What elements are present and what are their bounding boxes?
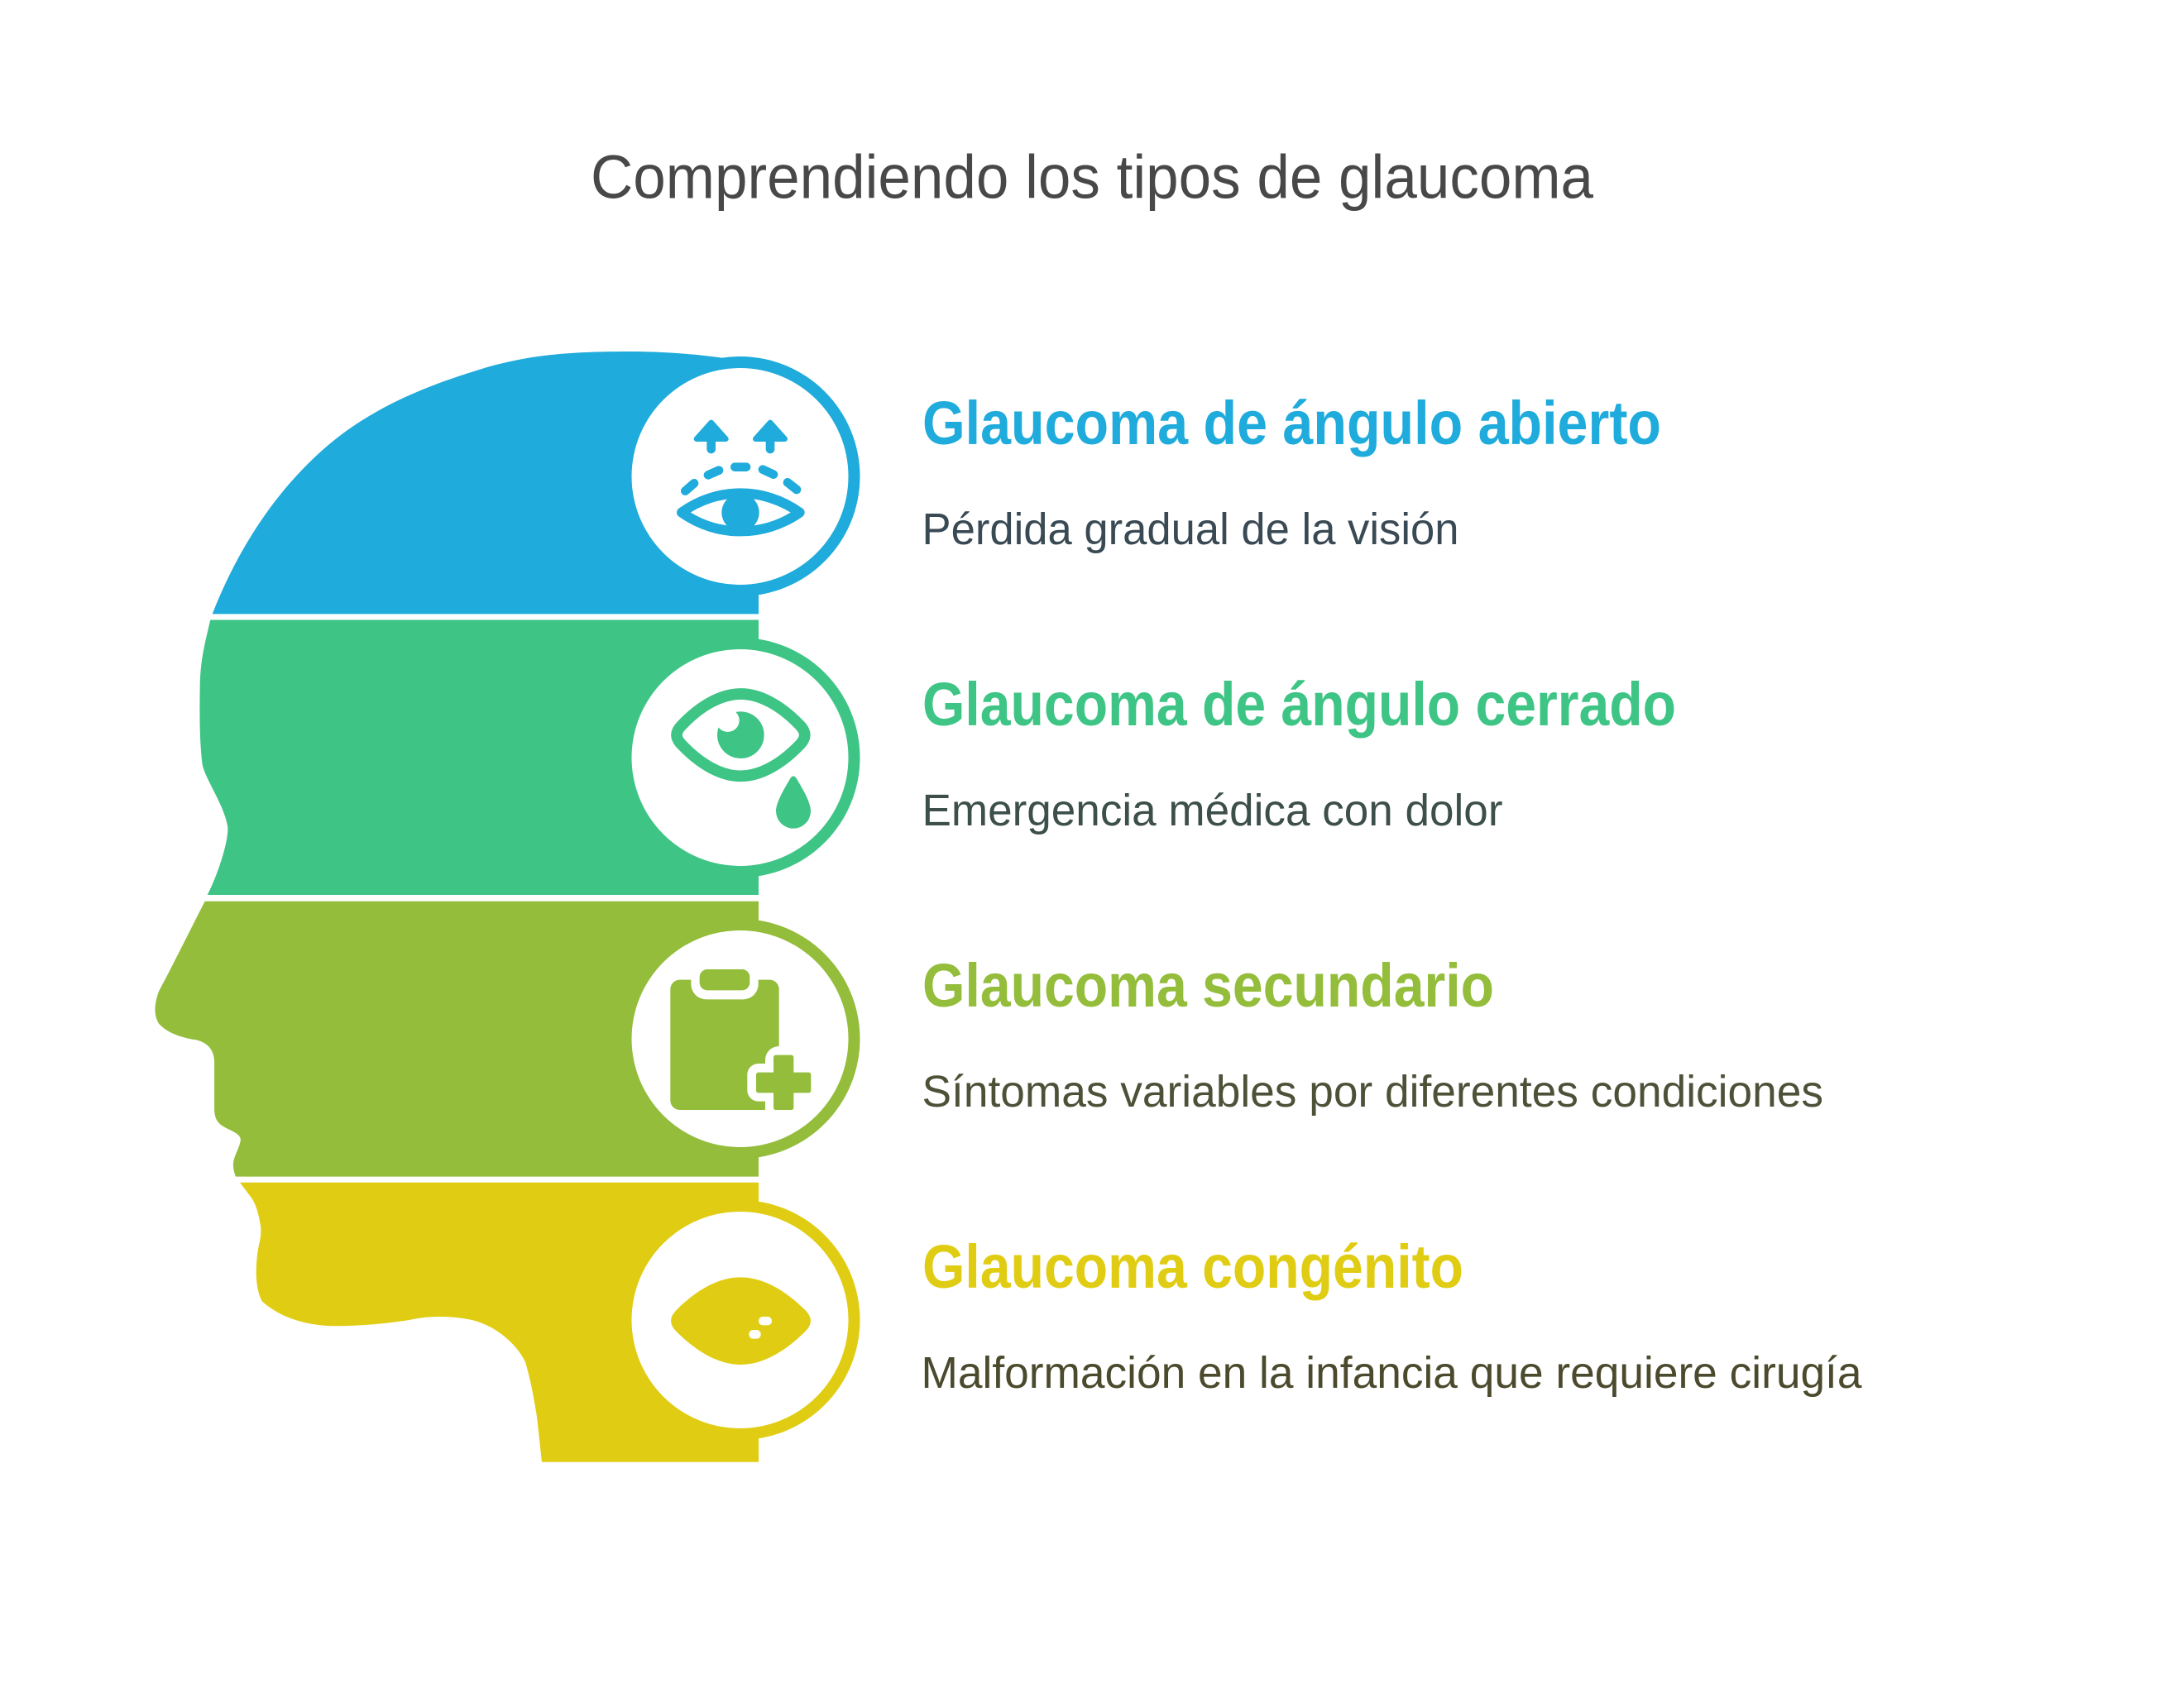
icon background [632,930,849,1147]
panel: glaucoma de ángulo abierto (head band) [213,352,860,614]
heading: Glaucoma de ángulo abierto [922,389,1661,457]
heading: Glaucoma secundario [922,951,1494,1020]
title: Comprendiendo los tipos de glaucoma [591,142,1594,212]
icon background [632,649,849,866]
icon ring [620,638,860,878]
text block: glaucoma de ángulo abierto [922,389,1661,554]
heading: Glaucoma congénito [922,1232,1463,1301]
head section: jaw and neck [240,1183,759,1462]
panel: glaucoma de ángulo cerrado (head band) [199,620,860,895]
panel: glaucoma secundario (head band) [156,901,860,1177]
icon: eye with rising pressure [682,423,800,531]
icon ring [620,1200,860,1440]
icon: eye with tear [677,694,811,829]
icon: clipboard with plus [670,969,811,1110]
description: Síntomas variables por diferentes condiciones [922,1067,1823,1117]
text block: glaucoma secundario [922,951,1823,1117]
icon ring [620,356,860,596]
icon background [632,368,849,585]
icon ring [620,919,860,1159]
head section: nose [156,901,759,1177]
head section: forehead [199,620,759,895]
head section: crown [213,352,759,614]
icon background [632,1212,849,1428]
icon: clouded eye [671,1277,811,1365]
description: Pérdida gradual de la visión [922,505,1459,554]
text block: glaucoma congénito [922,1232,1862,1398]
heading: Glaucoma de ángulo cerrado [922,670,1676,739]
description: Emergencia médica con dolor [922,786,1503,835]
text block: glaucoma de ángulo cerrado [922,670,1676,835]
description: Malformación en la infancia que requiere cirugía [922,1348,1862,1398]
panel: glaucoma congénito (head band) [240,1183,860,1462]
